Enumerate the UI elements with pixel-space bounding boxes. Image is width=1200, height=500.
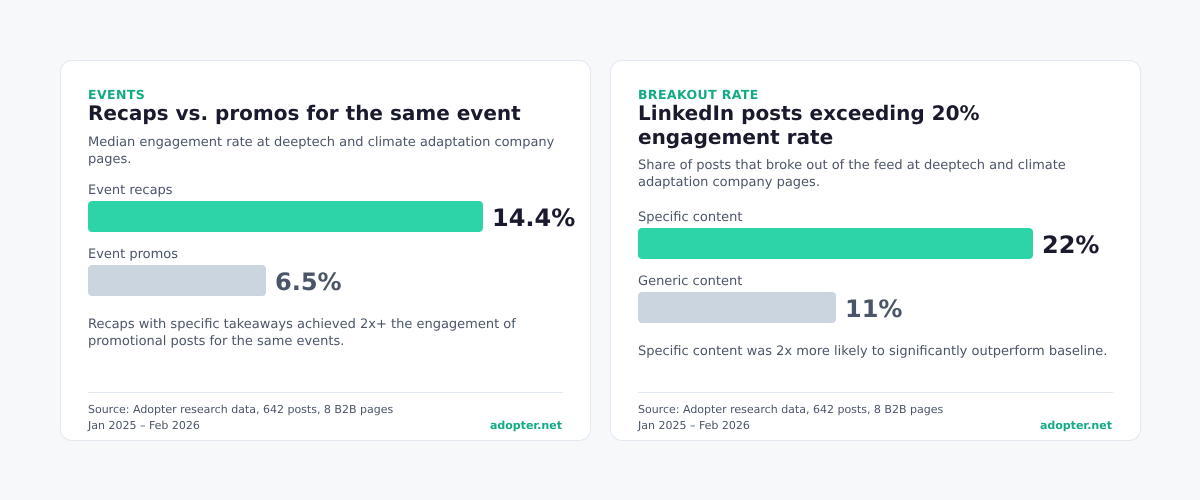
description: median engagement: pages. <box>88 152 131 167</box>
panel: breakout rate <box>610 60 1141 441</box>
heading: linkedin posts <box>638 101 980 149</box>
label: event promos: Event promos <box>88 247 178 262</box>
bar: generic content <box>638 292 836 323</box>
description: median engagement: Median engagement rate at deeptech and climate adaptation company <box>88 135 554 150</box>
source note: Source: Adopter research data, 642 posts, 8 B2B pages <box>638 403 943 416</box>
label: event recaps: Event recaps <box>88 183 173 198</box>
description: share of posts <box>638 158 1066 190</box>
label: generic content: Generic content <box>638 274 742 289</box>
takeaway text: Recaps with specific takeaways achieved 2x+ the engagement of <box>88 317 516 332</box>
heading: linkedin posts: LinkedIn posts exceeding 20% <box>638 101 980 125</box>
label: specific content: Specific content <box>638 210 743 225</box>
heading: linkedin posts: engagement rate <box>638 125 833 149</box>
source note: Jan 2025 – Feb 2026 <box>88 418 200 432</box>
divider <box>88 392 563 393</box>
takeaway text: promotional posts for the same events. <box>88 334 344 349</box>
bar: specific content <box>638 228 1033 259</box>
source note <box>87 403 393 432</box>
value: 14.4%: 14.4% <box>492 204 575 232</box>
value: 22%: 22% <box>1042 231 1099 259</box>
value: 11%: 11% <box>845 295 902 323</box>
description: median engagement <box>88 135 554 167</box>
bar: event promos <box>88 265 266 296</box>
description: share of posts: Share of posts that broke out of the feed at deeptech and climate <box>638 158 1066 173</box>
bar: event recaps <box>88 201 483 232</box>
brand: adopter.net: adopter.net <box>1040 419 1112 432</box>
takeaway text: Specific content was 2x more likely to significantly outperform baseline. <box>638 344 1107 359</box>
source note <box>637 403 943 432</box>
brand: adopter.net: adopter.net <box>490 419 562 432</box>
eyebrow: breakout rate: BREAKOUT RATE <box>638 87 759 102</box>
eyebrow: events: EVENTS <box>88 87 145 102</box>
panel: events <box>60 60 591 441</box>
source note: Source: Adopter research data, 642 posts, 8 B2B pages <box>88 403 393 416</box>
takeaway text <box>88 317 516 349</box>
description: share of posts: adaptation company pages. <box>638 175 820 190</box>
value: 6.5%: 6.5% <box>275 268 342 296</box>
source note: Jan 2025 – Feb 2026 <box>638 418 750 432</box>
divider <box>638 392 1113 393</box>
heading: recaps vs promos: Recaps vs. promos for the same event <box>88 101 521 125</box>
